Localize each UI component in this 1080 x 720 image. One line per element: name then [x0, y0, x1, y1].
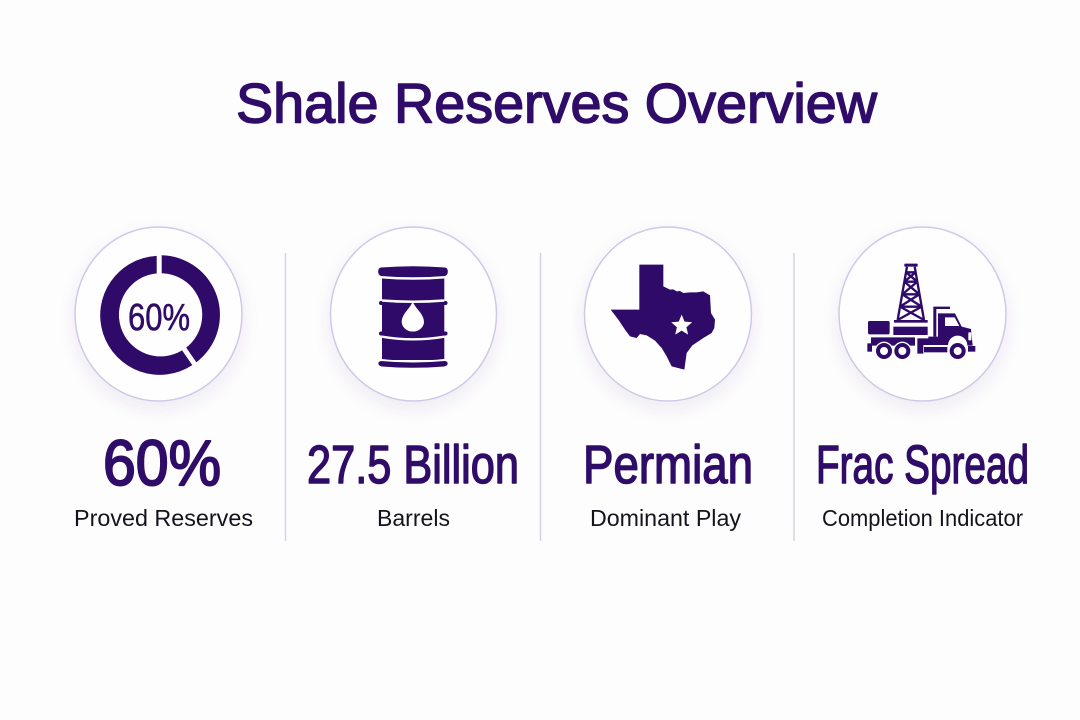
icon circle: frac spread — [839, 227, 1006, 401]
stat value: permian: Permian — [583, 435, 753, 495]
icon: texas map with star — [611, 265, 715, 370]
icon circle: proved reserves — [75, 227, 242, 401]
stat value: 27.5 billion: 27.5 Billion — [307, 435, 519, 495]
stat label: completion indicator: Completion Indicator — [822, 505, 1023, 531]
icon circle: permian — [584, 227, 752, 401]
icon: oil barrel — [378, 266, 448, 368]
title: Shale Reserves Overview — [236, 72, 878, 134]
icon circle: barrels — [330, 227, 496, 401]
stat value: 60%: 60% — [103, 427, 221, 499]
panel: proved reserves — [74, 227, 253, 531]
panel: permian — [583, 227, 753, 531]
icon: donut chart 60 percent — [100, 255, 220, 375]
stat label: dominant play: Dominant Play — [590, 505, 741, 531]
icon: donut chart 60 percent: 60% — [128, 297, 190, 339]
panel: barrels — [307, 227, 519, 531]
icon: drilling rig truck — [867, 264, 975, 360]
stat label: proved reserves: Proved Reserves — [74, 505, 253, 531]
stat label: barrels: Barrels — [377, 505, 450, 531]
panel: frac spread — [816, 227, 1029, 531]
